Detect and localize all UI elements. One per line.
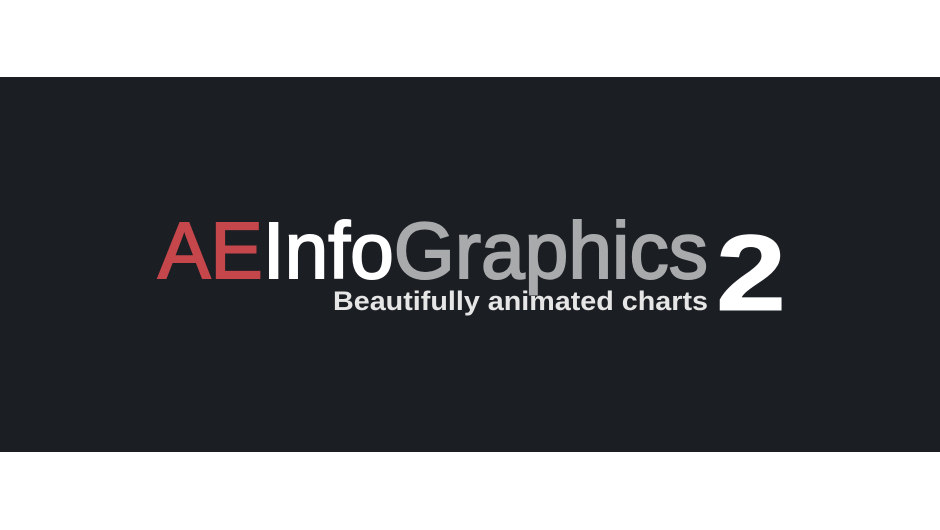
big number 2: 2 [716, 212, 786, 333]
dark banner panel [0, 77, 940, 452]
subtitle: Beautifully animated charts [333, 286, 708, 316]
title: AEInfoGraphics: AEInfoGraphics [158, 206, 708, 295]
